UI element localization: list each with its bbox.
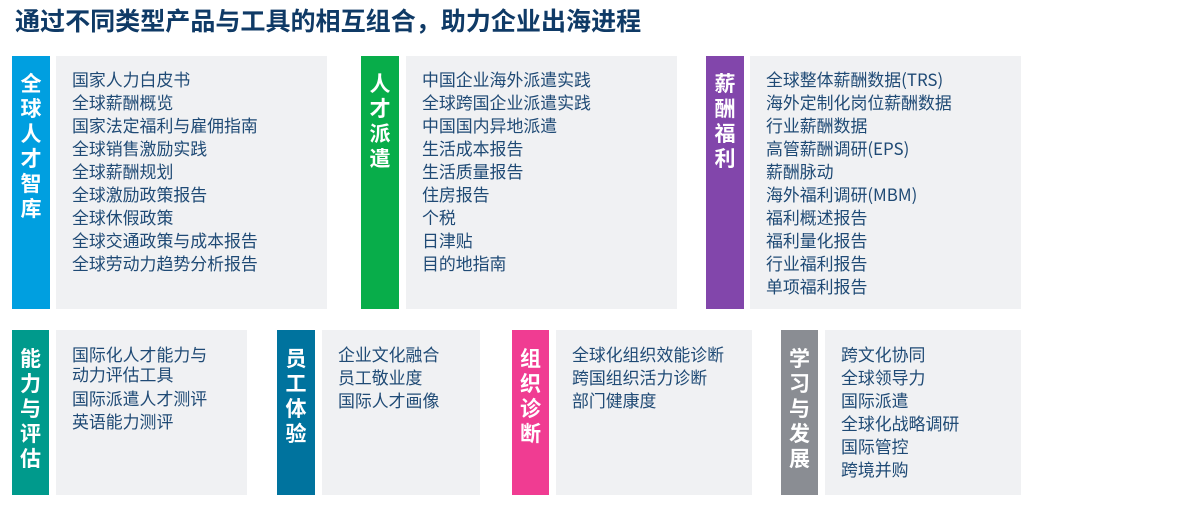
list panel: 能力与评估: 国际派遣人才测评 bbox=[72, 385, 207, 410]
side label: 学习与发展: 学 bbox=[789, 343, 810, 373]
list panel: 薪酬福利: 海外福利调研(MBM) bbox=[766, 181, 917, 206]
side label: 薪酬福利: 薪 bbox=[714, 68, 736, 98]
list panel: 员工体验: 企业文化融合 bbox=[338, 341, 439, 366]
side label: 学习与发展: 习 bbox=[789, 368, 810, 398]
list panel: 学习与发展 bbox=[825, 330, 1021, 495]
list panel: 薪酬福利: 行业薪酬数据 bbox=[766, 112, 867, 137]
list panel: 学习与发展: 国际派遣 bbox=[841, 387, 909, 412]
list panel: 全球人才智库 bbox=[56, 56, 327, 309]
list panel: 学习与发展: 跨境并购 bbox=[841, 456, 909, 481]
side label: 员工体验: 验 bbox=[286, 418, 306, 448]
side label: 员工体验: 体 bbox=[286, 393, 306, 423]
list panel: 全球人才智库: 全球薪酬概览 bbox=[72, 89, 173, 114]
list panel: 人才派遣: 目的地指南 bbox=[422, 250, 506, 275]
list panel: 薪酬福利: 福利量化报告 bbox=[766, 227, 867, 252]
list panel: 人才派遣: 全球跨国企业派遣实践 bbox=[422, 89, 591, 114]
side label: 学习与发展: 展 bbox=[789, 443, 810, 473]
list panel: 人才派遣: 生活质量报告 bbox=[422, 158, 523, 183]
side label: 全球人才智库: 全 bbox=[20, 68, 42, 98]
list panel: 学习与发展: 全球领导力 bbox=[841, 364, 925, 389]
side label: 薪酬福利: 酬 bbox=[714, 93, 736, 123]
side label: 组织诊断: 断 bbox=[520, 418, 541, 448]
side label: 全球人才智库: 库 bbox=[20, 193, 42, 223]
side label: 能力与评估: 能 bbox=[20, 343, 41, 373]
list panel: 人才派遣: 中国国内异地派遣 bbox=[422, 112, 557, 137]
list panel: 人才派遣: 个税 bbox=[422, 204, 456, 229]
title: 通过不同类型产品与工具的相互组合，助力企业出海进程 bbox=[15, 2, 641, 38]
side label: 全球人才智库: 人 bbox=[20, 118, 42, 148]
list panel: 能力与评估: 动力评估工具 bbox=[72, 361, 173, 386]
side label: 员工体验 bbox=[277, 330, 315, 495]
list panel: 人才派遣: 中国企业海外派遣实践 bbox=[422, 66, 591, 91]
side label: 能力与评估 bbox=[12, 330, 49, 495]
side label: 全球人才智库: 球 bbox=[20, 93, 42, 123]
side label: 人才派遣: 遣 bbox=[370, 143, 390, 173]
list panel: 组织诊断 bbox=[556, 330, 752, 495]
list panel: 薪酬福利: 海外定制化岗位薪酬数据 bbox=[766, 89, 952, 114]
list panel: 全球人才智库: 全球薪酬规划 bbox=[72, 158, 173, 183]
list panel: 组织诊断: 部门健康度 bbox=[572, 387, 656, 412]
side label: 能力与评估: 评 bbox=[20, 418, 41, 448]
side label: 组织诊断: 织 bbox=[520, 368, 541, 398]
list panel: 全球人才智库: 国家法定福利与雇佣指南 bbox=[72, 112, 258, 137]
list panel: 全球人才智库: 全球激励政策报告 bbox=[72, 181, 207, 206]
side label: 全球人才智库 bbox=[12, 56, 50, 309]
side label: 全球人才智库: 智 bbox=[20, 168, 42, 198]
list panel: 薪酬福利 bbox=[750, 56, 1021, 309]
list panel: 学习与发展: 跨文化协同 bbox=[841, 341, 925, 366]
list panel: 学习与发展: 国际管控 bbox=[841, 433, 909, 458]
side label: 人才派遣 bbox=[361, 56, 399, 309]
side label: 学习与发展 bbox=[781, 330, 818, 495]
side label: 员工体验: 员 bbox=[286, 343, 306, 373]
list panel: 全球人才智库: 全球交通政策与成本报告 bbox=[72, 227, 258, 252]
list panel: 能力与评估 bbox=[56, 330, 247, 495]
side label: 能力与评估: 力 bbox=[20, 368, 41, 398]
side label: 人才派遣: 人 bbox=[370, 68, 390, 98]
list panel: 人才派遣: 住房报告 bbox=[422, 181, 490, 206]
list panel: 薪酬福利: 单项福利报告 bbox=[766, 273, 867, 298]
side label: 薪酬福利: 利 bbox=[714, 143, 736, 173]
list panel: 人才派遣: 生活成本报告 bbox=[422, 135, 523, 160]
side label: 组织诊断: 诊 bbox=[520, 393, 541, 423]
side label: 学习与发展: 与 bbox=[789, 393, 810, 423]
list panel: 学习与发展: 全球化战略调研 bbox=[841, 410, 959, 435]
list panel: 薪酬福利: 薪酬脉动 bbox=[766, 158, 834, 183]
list panel: 全球人才智库: 国家人力白皮书 bbox=[72, 66, 190, 91]
list panel: 薪酬福利: 行业福利报告 bbox=[766, 250, 867, 275]
list panel: 组织诊断: 全球化组织效能诊断 bbox=[572, 341, 724, 366]
list panel: 全球人才智库: 全球劳动力趋势分析报告 bbox=[72, 250, 258, 275]
list panel: 组织诊断: 跨国组织活力诊断 bbox=[572, 364, 707, 389]
side label: 人才派遣: 派 bbox=[370, 118, 390, 148]
side label: 能力与评估: 估 bbox=[20, 443, 41, 473]
list panel: 人才派遣 bbox=[406, 56, 677, 309]
list panel: 薪酬福利: 福利概述报告 bbox=[766, 204, 867, 229]
side label: 人才派遣: 才 bbox=[370, 93, 390, 123]
side label: 组织诊断: 组 bbox=[520, 343, 541, 373]
list panel: 人才派遣: 日津贴 bbox=[422, 227, 473, 252]
list panel: 薪酬福利: 全球整体薪酬数据(TRS) bbox=[766, 66, 943, 91]
side label: 薪酬福利: 福 bbox=[714, 118, 736, 148]
list panel: 员工体验: 员工敬业度 bbox=[338, 364, 422, 389]
side label: 组织诊断 bbox=[512, 330, 549, 495]
list panel: 薪酬福利: 高管薪酬调研(EPS) bbox=[766, 135, 909, 160]
list panel: 员工体验: 国际人才画像 bbox=[338, 387, 439, 412]
side label: 学习与发展: 发 bbox=[789, 418, 810, 448]
side label: 员工体验: 工 bbox=[286, 368, 306, 398]
list panel: 能力与评估: 英语能力测评 bbox=[72, 408, 173, 433]
side label: 薪酬福利 bbox=[706, 56, 744, 309]
list panel: 能力与评估: 国际化人才能力与 bbox=[72, 341, 207, 366]
list panel: 员工体验 bbox=[322, 330, 480, 495]
list panel: 全球人才智库: 全球销售激励实践 bbox=[72, 135, 207, 160]
side label: 全球人才智库: 才 bbox=[20, 143, 42, 173]
list panel: 全球人才智库: 全球休假政策 bbox=[72, 204, 173, 229]
side label: 能力与评估: 与 bbox=[20, 393, 41, 423]
